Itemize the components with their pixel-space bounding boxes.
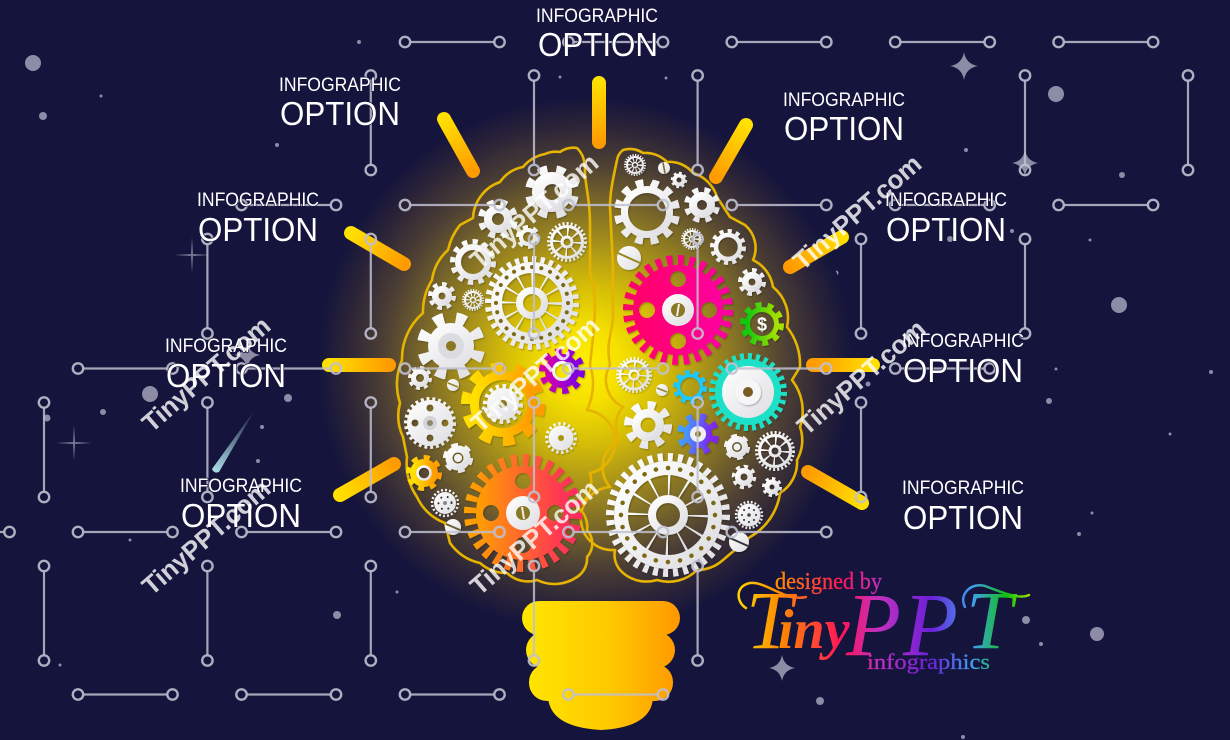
gears: right hemisphere — [610, 155, 794, 573]
gear: green dollar — [743, 305, 781, 343]
option label: left 3: OPTION — [166, 357, 286, 394]
watermarks: TinyPPT.com — [136, 473, 276, 601]
gear: small lower left — [410, 368, 430, 388]
option label: top: OPTION — [538, 26, 658, 63]
option label: right 4 — [902, 478, 1024, 536]
watermarks: TinyPPT.com — [136, 310, 276, 438]
option label: upper right: INFOGRAPHIC — [783, 90, 905, 111]
option label: left 4: INFOGRAPHIC — [180, 476, 302, 497]
gear: large spoked — [488, 259, 576, 347]
screw: left 2 — [445, 519, 461, 535]
option label: left 4: OPTION — [181, 497, 301, 534]
gear: teal — [712, 356, 784, 428]
gear: giant spoked — [610, 457, 726, 573]
logo swash left — [739, 583, 806, 608]
option label: right 3: OPTION — [903, 352, 1023, 389]
option label: left 3 — [165, 336, 287, 394]
bulb base — [522, 601, 680, 730]
option label: right 3: INFOGRAPHIC — [902, 331, 1024, 352]
gear: pink — [628, 260, 728, 360]
logo main word: P — [845, 576, 901, 675]
watermarks: TinyPPT.com — [787, 148, 927, 276]
gear: tiny fine — [463, 290, 483, 310]
gear: ring — [452, 242, 494, 282]
logo top line: designed by — [775, 569, 882, 595]
gear: hex nut right — [726, 436, 748, 458]
watermarks: TinyPPT.com — [465, 310, 605, 438]
gear: large ring — [614, 179, 680, 245]
option label: upper left: INFOGRAPHIC — [279, 75, 401, 96]
gear: blue violet — [679, 415, 717, 453]
gear: top fine — [625, 155, 645, 175]
option label: top: INFOGRAPHIC — [536, 6, 658, 27]
screw: right 2 — [617, 246, 641, 270]
watermarks: TinyPPT.com — [464, 147, 604, 275]
watermarks — [136, 147, 931, 601]
gear: purple — [542, 351, 582, 391]
option label: left 2: OPTION — [198, 211, 318, 248]
option label: right 2: OPTION — [886, 211, 1006, 248]
logo main word: T — [746, 574, 798, 666]
gear: small — [430, 284, 454, 308]
gear: tiny — [672, 173, 686, 187]
gear: big white — [419, 314, 483, 378]
light rays — [329, 83, 873, 503]
option label: left 4 — [180, 476, 302, 534]
logo: designed by TinyPPT infographics — [739, 569, 1029, 675]
screw: right 1 — [658, 162, 670, 174]
gear: small 2 — [764, 478, 780, 496]
meteor — [212, 408, 256, 473]
brain outline — [397, 148, 803, 584]
gear: white medium — [628, 405, 668, 445]
gear: thin ring — [712, 231, 744, 263]
gear: four holes — [406, 399, 454, 447]
gear: dotted right — [736, 502, 762, 528]
gear: orange red — [470, 460, 576, 566]
option label: right 2 — [885, 190, 1007, 248]
gear: top left — [524, 164, 580, 220]
gear: fine spoked right — [756, 432, 794, 470]
logo swash right — [963, 585, 1029, 607]
gear: fine centre — [618, 358, 650, 392]
gear: cyan ring — [675, 372, 705, 402]
gear: hex nut — [518, 227, 538, 247]
logo main word: P — [902, 576, 958, 675]
watermarks: TinyPPT.com — [464, 473, 604, 601]
gear: green dollar: $ — [757, 314, 767, 334]
option label: right 4: OPTION — [903, 499, 1023, 536]
gear: fine spoked — [548, 224, 586, 260]
gear: upper left — [478, 199, 518, 239]
gear: medium — [684, 187, 720, 223]
star sparkles — [56, 52, 1038, 681]
gears: left hemisphere — [406, 164, 586, 566]
option label: upper left — [279, 75, 401, 132]
option label: left 3: INFOGRAPHIC — [165, 336, 287, 357]
option label: left 2 — [197, 190, 319, 248]
watermarks: TinyPPT.com — [791, 313, 931, 441]
gear: yellow small — [408, 458, 440, 488]
option label: upper right — [783, 90, 905, 147]
option label: upper right: OPTION — [784, 110, 904, 147]
screw: left 1 — [447, 379, 459, 391]
logo main word: iny — [778, 599, 851, 661]
option label: right 3 — [902, 331, 1024, 389]
screw: right 3 — [656, 384, 668, 396]
gear: hex nut — [446, 446, 470, 470]
option label: right 4: INFOGRAPHIC — [902, 478, 1024, 499]
gear: small right — [740, 270, 764, 294]
gear: centre small — [546, 424, 576, 452]
option label: upper left: OPTION — [280, 95, 400, 132]
logo main word: T — [966, 574, 1018, 666]
gear: yellow orange — [466, 367, 540, 441]
option label: top — [536, 6, 658, 63]
option label: right 2: INFOGRAPHIC — [885, 190, 1007, 211]
logo bottom line: infographics — [867, 649, 990, 674]
light bulb glow — [317, 97, 853, 633]
option label: left 2: INFOGRAPHIC — [197, 190, 319, 211]
gear: small fine — [682, 229, 702, 249]
gear: small 1 — [734, 466, 754, 488]
gear: small dotted — [432, 490, 458, 516]
screw: right 4 — [729, 532, 749, 552]
